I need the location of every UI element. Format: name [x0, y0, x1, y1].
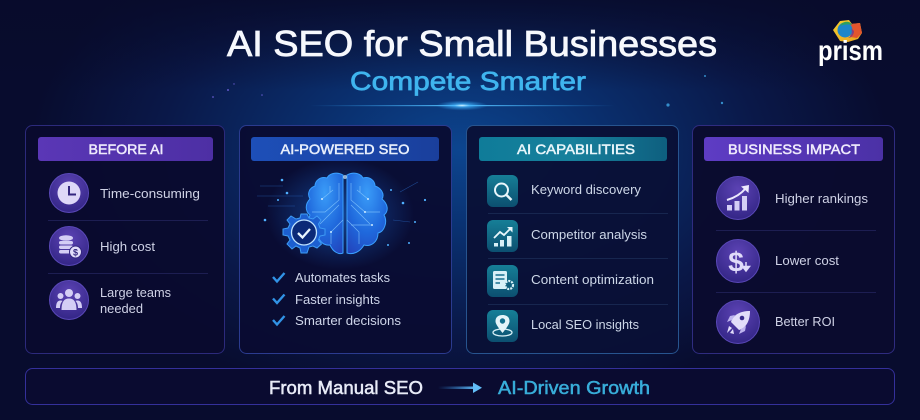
heading: AI capabilities	[479, 137, 667, 161]
icon: content settings	[487, 265, 518, 297]
icon: AI brain with gear	[257, 158, 426, 270]
text: AI-driven growth: AI-Driven Growth	[498, 378, 650, 398]
text: large teams needed: needed	[100, 301, 143, 316]
arrow	[438, 382, 482, 393]
panel: AI-powered SEO	[240, 126, 452, 354]
text: higher rankings: Higher rankings	[775, 191, 869, 206]
icon: magnifier	[487, 175, 518, 207]
text: lower cost: Lower cost	[775, 253, 839, 268]
text: content optimization: Content optimization	[531, 272, 654, 287]
logo: prism	[818, 20, 883, 66]
heading: before AI	[38, 137, 213, 161]
text: from manual SEO: From Manual SEO	[269, 378, 423, 398]
banner: from manual SEO to AI-driven growth	[26, 368, 894, 404]
text: keyword discovery: Keyword discovery	[531, 182, 641, 197]
icon: rankings up	[716, 176, 760, 220]
text: local SEO insights: Local SEO insights	[531, 317, 639, 332]
text: competitor analysis: Competitor analysis	[531, 227, 648, 242]
text: time-consuming: Time-consuming	[100, 186, 200, 201]
text: large teams needed: Large teams	[100, 285, 171, 300]
icon: rocket	[716, 300, 760, 344]
icon: dollar down	[716, 240, 760, 282]
check item: automates tasks: Automates tasks	[295, 270, 390, 285]
icon: coins: $	[73, 248, 78, 258]
check item: faster insights: Faster insights	[295, 292, 380, 307]
heading: AI-powered SEO	[251, 137, 439, 161]
icon: prism logo mark	[833, 20, 862, 42]
wordmark: prism	[818, 35, 883, 66]
text: high cost: High cost	[100, 239, 155, 254]
icon: clock	[50, 174, 88, 212]
glow divider	[310, 100, 615, 110]
icon: coins	[50, 226, 88, 266]
subtitle: Compete Smarter	[350, 66, 586, 96]
heading: business impact	[704, 137, 883, 161]
text: large teams needed	[100, 285, 171, 316]
icon: growth chart	[487, 220, 518, 252]
heading: business impact: BUSINESS IMPACT	[728, 141, 860, 157]
panel: before AI	[26, 126, 224, 354]
title: AI SEO for Small Businesses	[227, 23, 717, 64]
icon: dollar down: $	[728, 246, 744, 278]
list: benefits	[273, 270, 402, 328]
text: better ROI: Better ROI	[775, 314, 835, 329]
heading: before AI: BEFORE AI	[88, 141, 164, 157]
check item: smarter decisions: Smarter decisions	[295, 313, 402, 328]
icon: team	[50, 280, 88, 320]
panel: AI capabilities	[466, 126, 678, 354]
icon: map pin	[487, 310, 518, 342]
heading: AI-powered SEO: AI-POWERED SEO	[280, 141, 410, 157]
heading: AI capabilities: AI CAPABILITIES	[517, 141, 635, 157]
panel: business impact	[692, 126, 894, 354]
